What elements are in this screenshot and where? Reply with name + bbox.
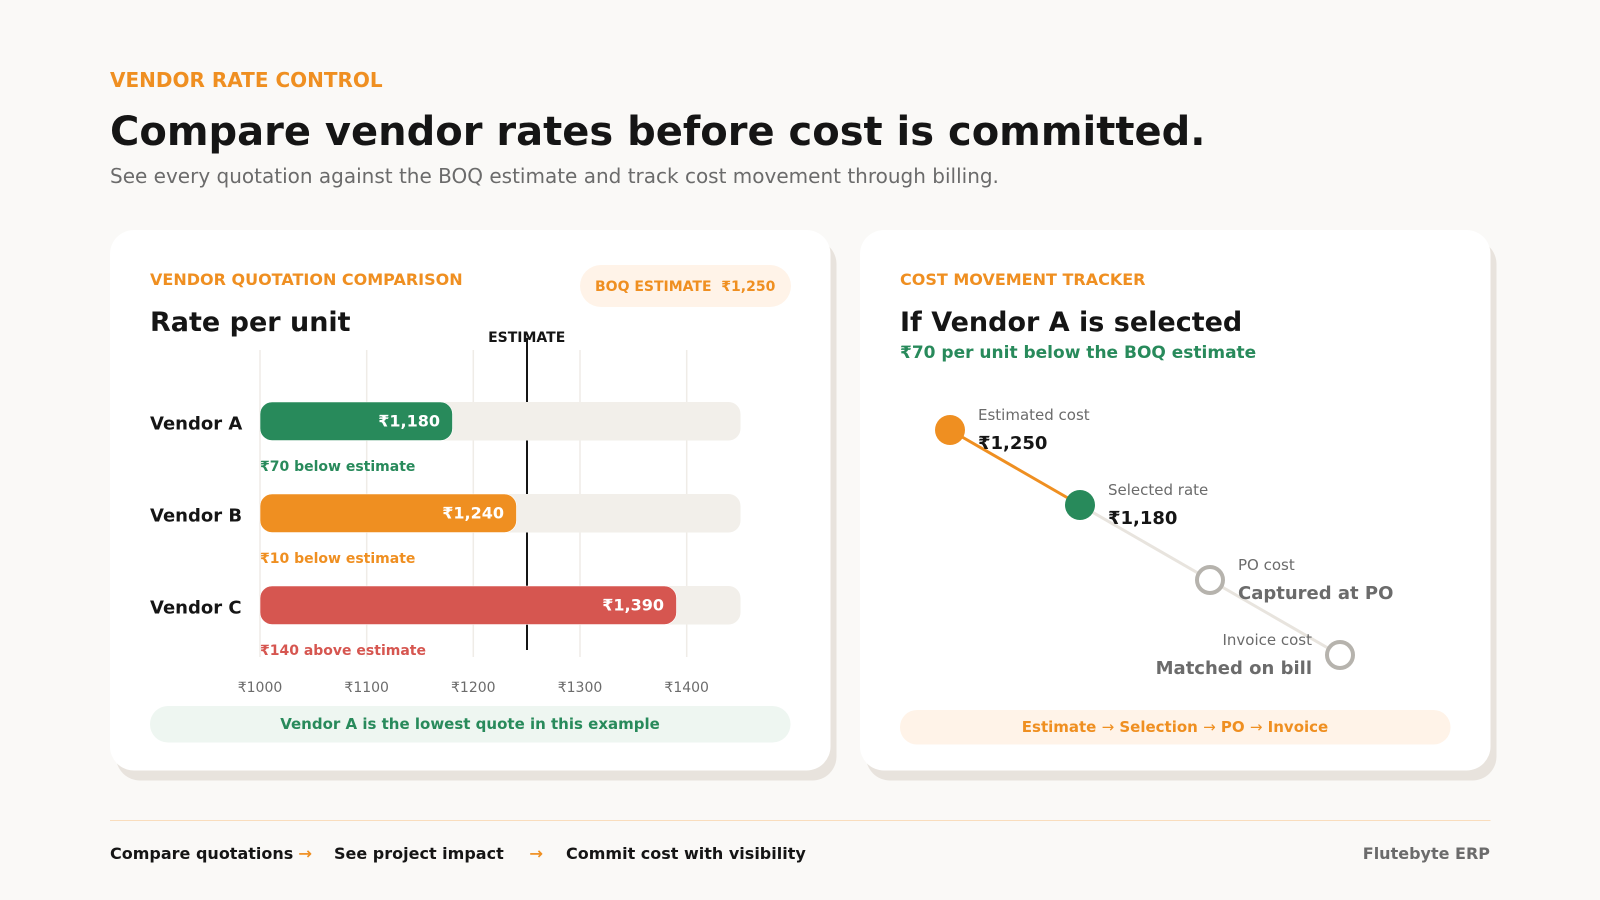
step: invoice cost: Invoice cost	[1222, 631, 1312, 649]
panel heading: Rate per unit	[150, 307, 351, 338]
bar chart	[150, 330, 740, 696]
panel heading: If Vendor A is selected	[900, 307, 1242, 338]
step: PO cost	[1197, 556, 1393, 604]
footer flow	[110, 844, 806, 863]
step: invoice cost	[1156, 631, 1353, 679]
axis labels: ₹1400	[664, 680, 709, 696]
callout: process flow: Estimate → Selection → PO → Invoice	[1022, 718, 1328, 736]
callout: process flow	[900, 710, 1450, 744]
row: vendor C: ₹140 above estimate	[260, 643, 426, 659]
row: vendor A: ₹70 below estimate	[260, 459, 415, 475]
step: invoice cost: Matched on bill	[1156, 658, 1312, 679]
panel subheading: ₹70 per unit below the BOQ estimate	[900, 343, 1256, 363]
step: selected rate: Selected rate	[1108, 481, 1208, 499]
footer flow: Commit cost with visibility	[566, 844, 806, 863]
panel: cost movement tracker	[860, 230, 1496, 780]
row: vendor B	[150, 494, 740, 567]
step: PO cost: PO cost	[1238, 556, 1295, 574]
axis labels: ₹1100	[344, 680, 389, 696]
row: vendor C: ₹1,390	[602, 596, 664, 614]
axis labels: ₹1000	[238, 680, 282, 696]
row: vendor C: Vendor C	[150, 598, 242, 618]
subtitle: See every quotation against the BOQ estimate and track cost movement through billing.	[110, 164, 999, 188]
estimate pill: BOQ ESTIMATE ₹1,250	[595, 279, 776, 295]
axis labels: ₹1200	[451, 680, 496, 696]
step: estimated cost: Estimated cost	[978, 406, 1090, 424]
cost movement line	[950, 430, 1340, 655]
row: vendor B: ₹1,240	[442, 504, 504, 522]
step: selected rate: ₹1,180	[1108, 508, 1177, 529]
axis labels: ₹1300	[558, 680, 602, 696]
step: selected rate	[1065, 481, 1208, 529]
footer flow: →	[530, 844, 543, 863]
row: vendor A: ₹1,180	[378, 412, 440, 430]
panel eyebrow: COST MOVEMENT TRACKER	[900, 270, 1146, 289]
callout: lowest quote: Vendor A is the lowest quote in this example	[280, 715, 660, 733]
row: vendor A: Vendor A	[150, 414, 242, 434]
panel: vendor quotation comparison	[110, 230, 836, 780]
row: vendor A	[150, 402, 740, 475]
estimate pill	[580, 265, 791, 307]
row: vendor C	[150, 586, 740, 659]
footer brand: Flutebyte ERP	[1363, 844, 1490, 863]
row: vendor B: ₹10 below estimate	[260, 551, 415, 567]
eyebrow: VENDOR RATE CONTROL	[110, 68, 383, 92]
step: estimated cost	[935, 406, 1090, 454]
estimate line: ESTIMATE	[488, 330, 565, 346]
panel eyebrow: VENDOR QUOTATION COMPARISON	[150, 270, 463, 289]
footer flow: →	[298, 844, 312, 863]
axis labels	[238, 680, 709, 696]
title: Compare vendor rates before cost is committed.	[110, 109, 1205, 155]
footer flow: Compare quotations	[110, 844, 293, 863]
row: vendor B: Vendor B	[150, 506, 242, 526]
step: estimated cost: ₹1,250	[978, 433, 1047, 454]
footer flow: See project impact	[334, 844, 504, 863]
callout: lowest quote	[150, 706, 790, 742]
step: PO cost: Captured at PO	[1238, 583, 1393, 604]
